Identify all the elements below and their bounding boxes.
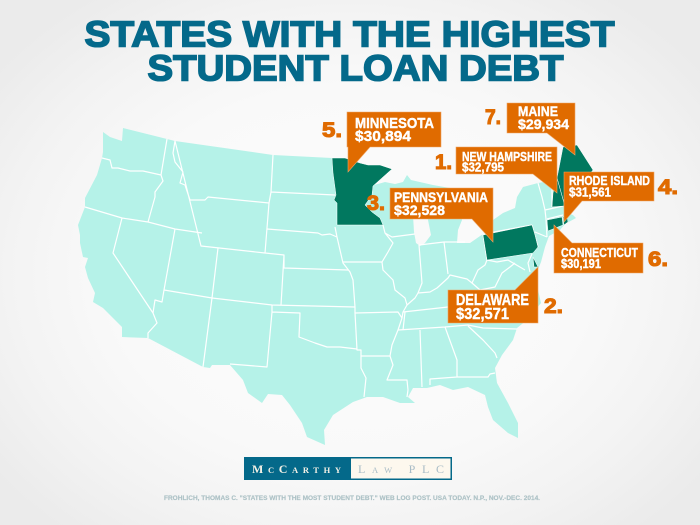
callout: Maine: $29,934 (518, 116, 569, 132)
state borders (85, 139, 563, 397)
number 2: 2. (544, 295, 563, 318)
number 5: 5. (322, 119, 342, 142)
callout: Delaware (448, 267, 538, 323)
title: STATES WITH THE HIGHEST (84, 14, 614, 54)
callout: Rhode Island: RHODE ISLAND (569, 173, 650, 188)
callout: Pennsylvania (390, 188, 493, 242)
callout: New Hampshire: NEW HAMPSHIRE (462, 149, 552, 164)
logo: McCarthy Law PLC: L AW PLC (358, 462, 444, 476)
callout: Minnesota: MINNESOTA (355, 115, 434, 132)
logo: McCarthy Law PLC: M C C ARTHY (252, 462, 341, 476)
callout: Connecticut: $30,191 (561, 256, 601, 271)
state: Delaware (533, 257, 538, 267)
state: New Hampshire (552, 178, 564, 207)
logo: McCarthy Law PLC (244, 457, 452, 480)
number 3: 3. (367, 192, 385, 215)
title: STUDENT LOAN DEBT (148, 48, 564, 88)
callout: Pennsylvania: PENNSYLVANIA (394, 189, 488, 205)
callout: Delaware: $32,571 (456, 306, 509, 323)
callout: Minnesota: $30,894 (355, 128, 412, 145)
callout: Delaware: DELAWARE (456, 292, 529, 309)
callout: Maine (507, 103, 575, 155)
map of the United States (78, 128, 593, 445)
callout: Connecticut: CONNECTICUT (561, 245, 638, 260)
number 7: 7. (485, 106, 501, 129)
callout: New Hampshire: $32,795 (462, 160, 504, 174)
callout: Pennsylvania: $32,528 (394, 202, 445, 218)
callout: Maine: MAINE (518, 103, 558, 119)
callout: New Hampshire (456, 147, 557, 193)
land outline (78, 128, 593, 445)
callout: Minnesota (347, 112, 441, 172)
number 4: 4. (658, 176, 678, 199)
state: Pennsylvania (483, 225, 538, 260)
state: Rhode Island (563, 216, 568, 225)
state: Connecticut (547, 217, 563, 231)
callout: Rhode Island (564, 172, 654, 222)
callout: Rhode Island: $31,561 (569, 184, 611, 200)
state: Maine (557, 145, 593, 203)
number 6: 6. (648, 248, 668, 271)
callout: Connecticut (554, 225, 643, 273)
state: Minnesota (332, 158, 392, 225)
lakes (413, 215, 431, 246)
title (84, 14, 614, 88)
number 1: 1. (435, 151, 452, 174)
source citation: FROHLICH, THOMAS C. "STATES WITH THE MOST STUDENT DEBT." WEB LOG POST. USA TODAY. N.P., NOV.-DEC. 2014. (164, 495, 540, 502)
